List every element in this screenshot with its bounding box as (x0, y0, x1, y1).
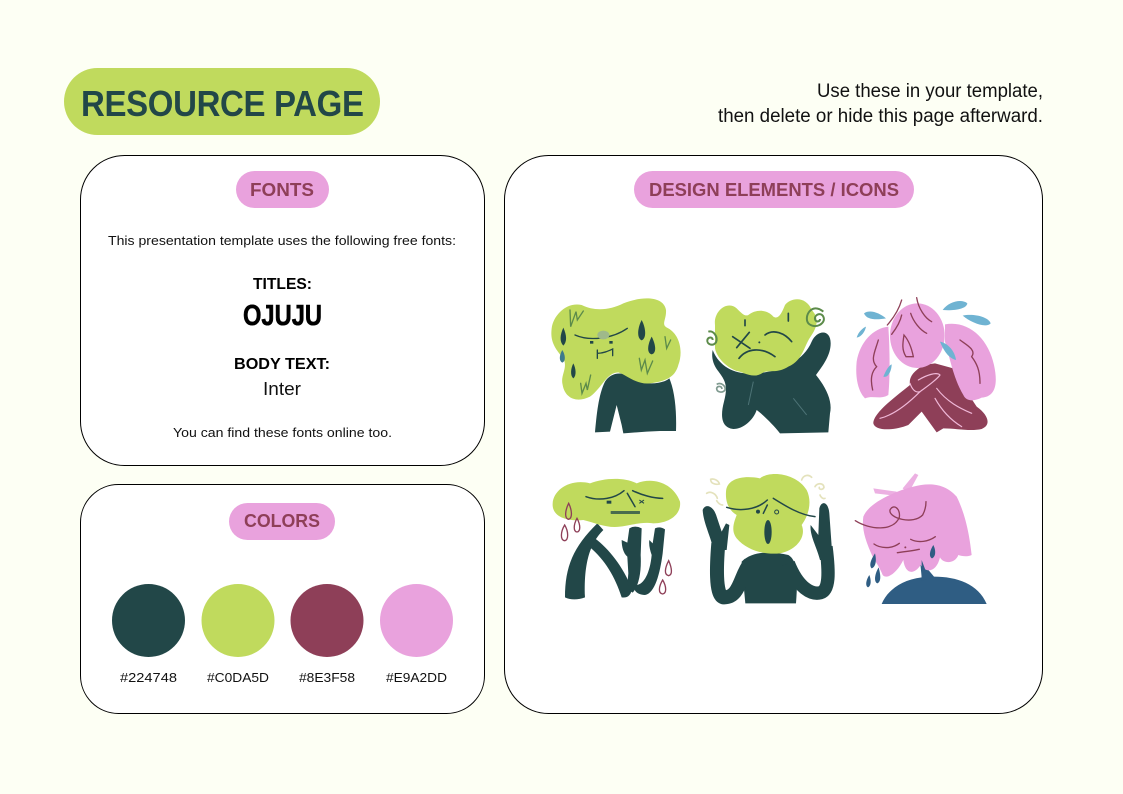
titles label: TITLES: (253, 276, 312, 293)
swatch: dark teal: #224748 (120, 670, 177, 685)
fonts footnote: You can find these fonts online too. (173, 425, 392, 440)
colors heading (229, 503, 335, 540)
instruction text: then delete or hide this page afterward. (718, 106, 1043, 127)
icon: dizzy green head (707, 299, 831, 433)
swatch: maroon: #8E3F58 (299, 670, 355, 685)
title pill: RESOURCE PAGE (81, 85, 364, 124)
fonts heading (236, 171, 329, 208)
body font sample: Inter (263, 378, 301, 399)
icon: sleepy pink head (855, 473, 987, 604)
fonts heading: FONTS (250, 180, 314, 200)
instruction text (718, 81, 1043, 127)
colors heading: COLORS (244, 511, 320, 531)
design elements heading (634, 171, 914, 208)
body text label: BODY TEXT: (234, 356, 330, 373)
swatch: pink (380, 584, 453, 685)
panel: fonts (80, 156, 484, 466)
swatch: dark teal (112, 584, 185, 685)
swatch: lime: #C0DA5D (207, 670, 269, 685)
design elements heading: DESIGN ELEMENTS / ICONS (649, 180, 899, 200)
panel: design elements (504, 156, 1042, 714)
swatch: lime (202, 584, 274, 685)
title pill (64, 68, 380, 135)
swatch: pink: #E9A2DD (386, 670, 447, 685)
icon: storm cloud head with raised arms (553, 474, 833, 603)
panel: colors (80, 484, 484, 714)
icon: melting green head (551, 298, 831, 433)
icon: shocked green head with hands up (703, 474, 833, 603)
icon: crying pink head (856, 298, 996, 432)
swatch: maroon (290, 584, 364, 685)
instruction text: Use these in your template, (817, 81, 1043, 102)
title font sample: OJUJU (243, 299, 322, 332)
fonts intro text: This presentation template uses the following free fonts: (108, 233, 456, 248)
